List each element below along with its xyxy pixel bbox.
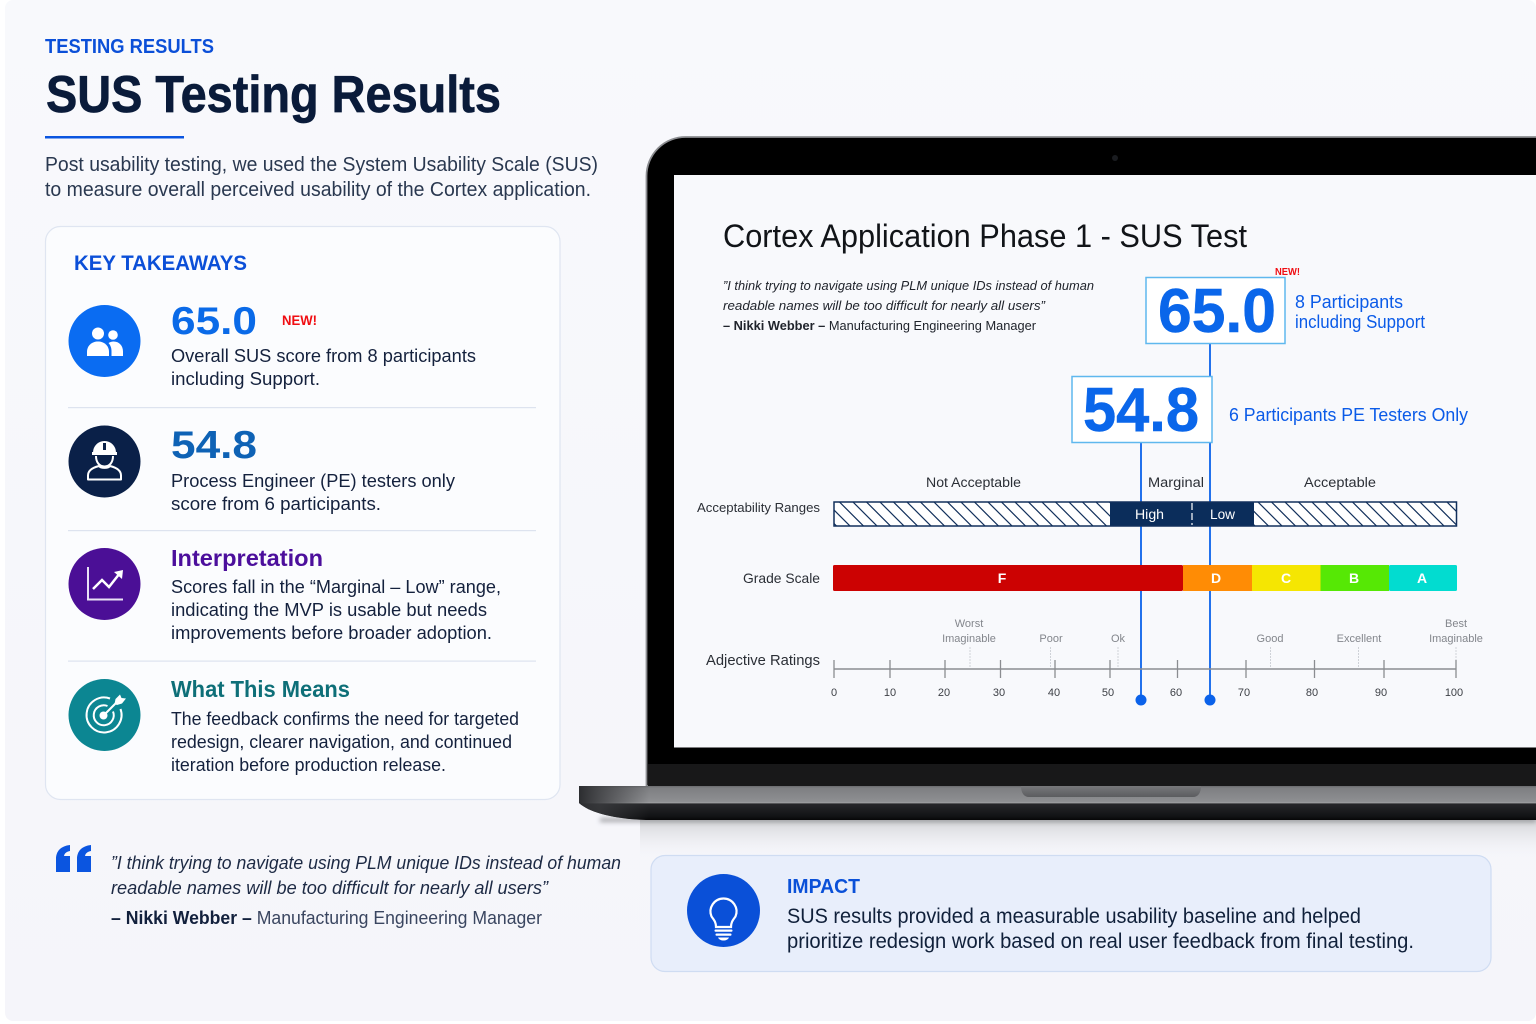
icon: quotation mark [56,845,91,872]
chart: grade scale bar: D [1211,570,1221,586]
chart: adjective ratings axis: 70 [1238,687,1250,699]
screen [674,175,1536,748]
screen quote [723,278,1094,333]
heading: what this means: What This Means [171,676,350,702]
chart: adjective ratings axis: 30 [993,687,1005,699]
icon: line chart [68,548,140,620]
screen title: Cortex Application Phase 1 - SUS Test [723,218,1247,254]
impact text: prioritize redesign work based on real user feedback from final testing. [787,930,1414,953]
chart: adjective ratings axis: Excellent [1337,633,1381,645]
header [45,36,598,201]
range labels: Not Acceptable [926,475,1021,490]
chart: adjective ratings axis: 50 [1102,687,1114,699]
chart: acceptability bar: Low [1210,507,1235,522]
laptop base [579,786,1536,820]
description [171,709,519,775]
chart: grade scale bar [833,565,1457,591]
laptop lid [646,137,1536,786]
score marker dots [1136,694,1216,706]
chart: acceptability bar: High [1135,507,1164,522]
eyebrow label: TESTING RESULTS [45,36,214,58]
chart: adjective ratings axis: Worst [955,618,983,630]
chart: adjective ratings axis: Imaginable [942,633,996,645]
takeaway: overall score [68,300,476,389]
icon: target [68,679,140,751]
callout: new badge: NEW! [1275,267,1300,278]
chart: acceptability bar [834,502,1456,526]
impact text: SUS results provided a measurable usability baseline and helped [787,905,1361,928]
description [171,346,476,389]
callout label: 8 participants: including Support [1295,311,1425,332]
score: 65.0: 65.0 [171,300,257,343]
callout label: 6 participants: 6 Participants PE Testers Only [1229,404,1469,425]
intro paragraph [45,154,598,201]
score: 54.8: 54.8 [171,424,257,467]
chart: adjective ratings axis: 40 [1048,687,1060,699]
laptop mockup [579,137,1536,820]
chart: adjective ratings axis: Best [1445,618,1467,630]
heading: key takeaways: KEY TAKEAWAYS [74,252,247,275]
description [171,577,501,643]
callout: score 54.8: 54.8 [1083,376,1199,445]
chart: adjective ratings axis: 10 [884,687,896,699]
chart: adjective ratings axis: 20 [938,687,950,699]
chart: adjective ratings axis: Ok [1111,633,1126,645]
row label: grade scale: Grade Scale [743,570,820,586]
title underline [45,136,184,138]
webcam [1112,155,1118,161]
title: SUS Testing Results [46,66,501,124]
callout label: 8 participants [1295,291,1425,332]
takeaway: interpretation [68,545,501,643]
description: redesign, clearer navigation, and continued [171,732,512,752]
laptop base shadow [600,818,1536,822]
icon: light bulb [687,874,760,947]
description: The feedback confirms the need for targeted [171,709,519,729]
chart: adjective ratings axis: 60 [1170,687,1182,699]
panel: impact [651,856,1491,972]
range labels: Marginal [1148,475,1204,490]
description: indicating the MVP is usable but needs [171,600,487,620]
chart: adjective ratings axis: 0 [831,687,837,699]
chart: adjective ratings axis: 80 [1306,687,1318,699]
chart: adjective ratings axis: 100 [1445,687,1463,699]
laptop notch [1021,786,1201,797]
chart: adjective ratings axis: Imaginable [1429,633,1483,645]
quote text: ”I think trying to navigate using PLM unique IDs instead of human [111,853,621,873]
callout label: 8 participants: 8 Participants [1295,291,1403,312]
description: including Support. [171,369,320,389]
user quote [56,845,621,928]
takeaway: PE score [68,424,455,514]
description: score from 6 participants. [171,494,381,514]
screen quote: ”I think trying to navigate using PLM unique IDs instead of human [723,278,1094,293]
icon: worker [68,426,140,498]
chart: grade scale bar: F [998,570,1007,586]
chart: grade scale bar: B [1349,570,1359,586]
description [171,471,455,514]
description: Scores fall in the “Marginal – Low” range, [171,577,501,597]
quote text [111,853,621,898]
panel: key takeaways [46,226,560,800]
score marker lines [1141,343,1210,700]
chart: adjective ratings axis [831,618,1483,699]
range labels [926,475,1376,490]
description: Overall SUS score from 8 participants [171,346,476,366]
chart: adjective ratings axis: Poor [1039,633,1063,645]
intro paragraph: to measure overall perceived usability of the Cortex application. [45,179,591,201]
badge: new: NEW! [282,312,317,328]
description: iteration before production release. [171,755,446,775]
description: Process Engineer (PE) testers only [171,471,455,491]
description: improvements before broader adoption. [171,623,492,643]
impact text [787,905,1414,953]
heading: impact: IMPACT [787,876,860,898]
quote attribution: – Nikki Webber – Manufacturing Engineering Manager [111,908,542,928]
screen quote: – Nikki Webber – Manufacturing Engineering Manager [723,318,1037,333]
icon: people [68,305,140,377]
chart: grade scale bar: A [1417,570,1427,586]
row label: acceptability ranges: Acceptability Ranges [697,500,820,515]
laptop reflection [640,820,1536,858]
row label: adjective ratings: Adjective Ratings [706,653,820,669]
chart: adjective ratings axis: Good [1257,633,1283,645]
screen quote: readable names will be too difficult for nearly all users” [723,298,1046,313]
chart: adjective ratings axis: 90 [1375,687,1387,699]
quote text: readable names will be too difficult for nearly all users” [111,878,549,898]
takeaway: what this means [68,676,519,775]
callout: score 65.0: 65.0 [1158,277,1276,346]
heading: interpretation: Interpretation [171,545,323,571]
intro paragraph: Post usability testing, we used the System Usability Scale (SUS) [45,154,598,176]
chart: grade scale bar: C [1281,570,1291,586]
range labels: Acceptable [1304,475,1376,490]
